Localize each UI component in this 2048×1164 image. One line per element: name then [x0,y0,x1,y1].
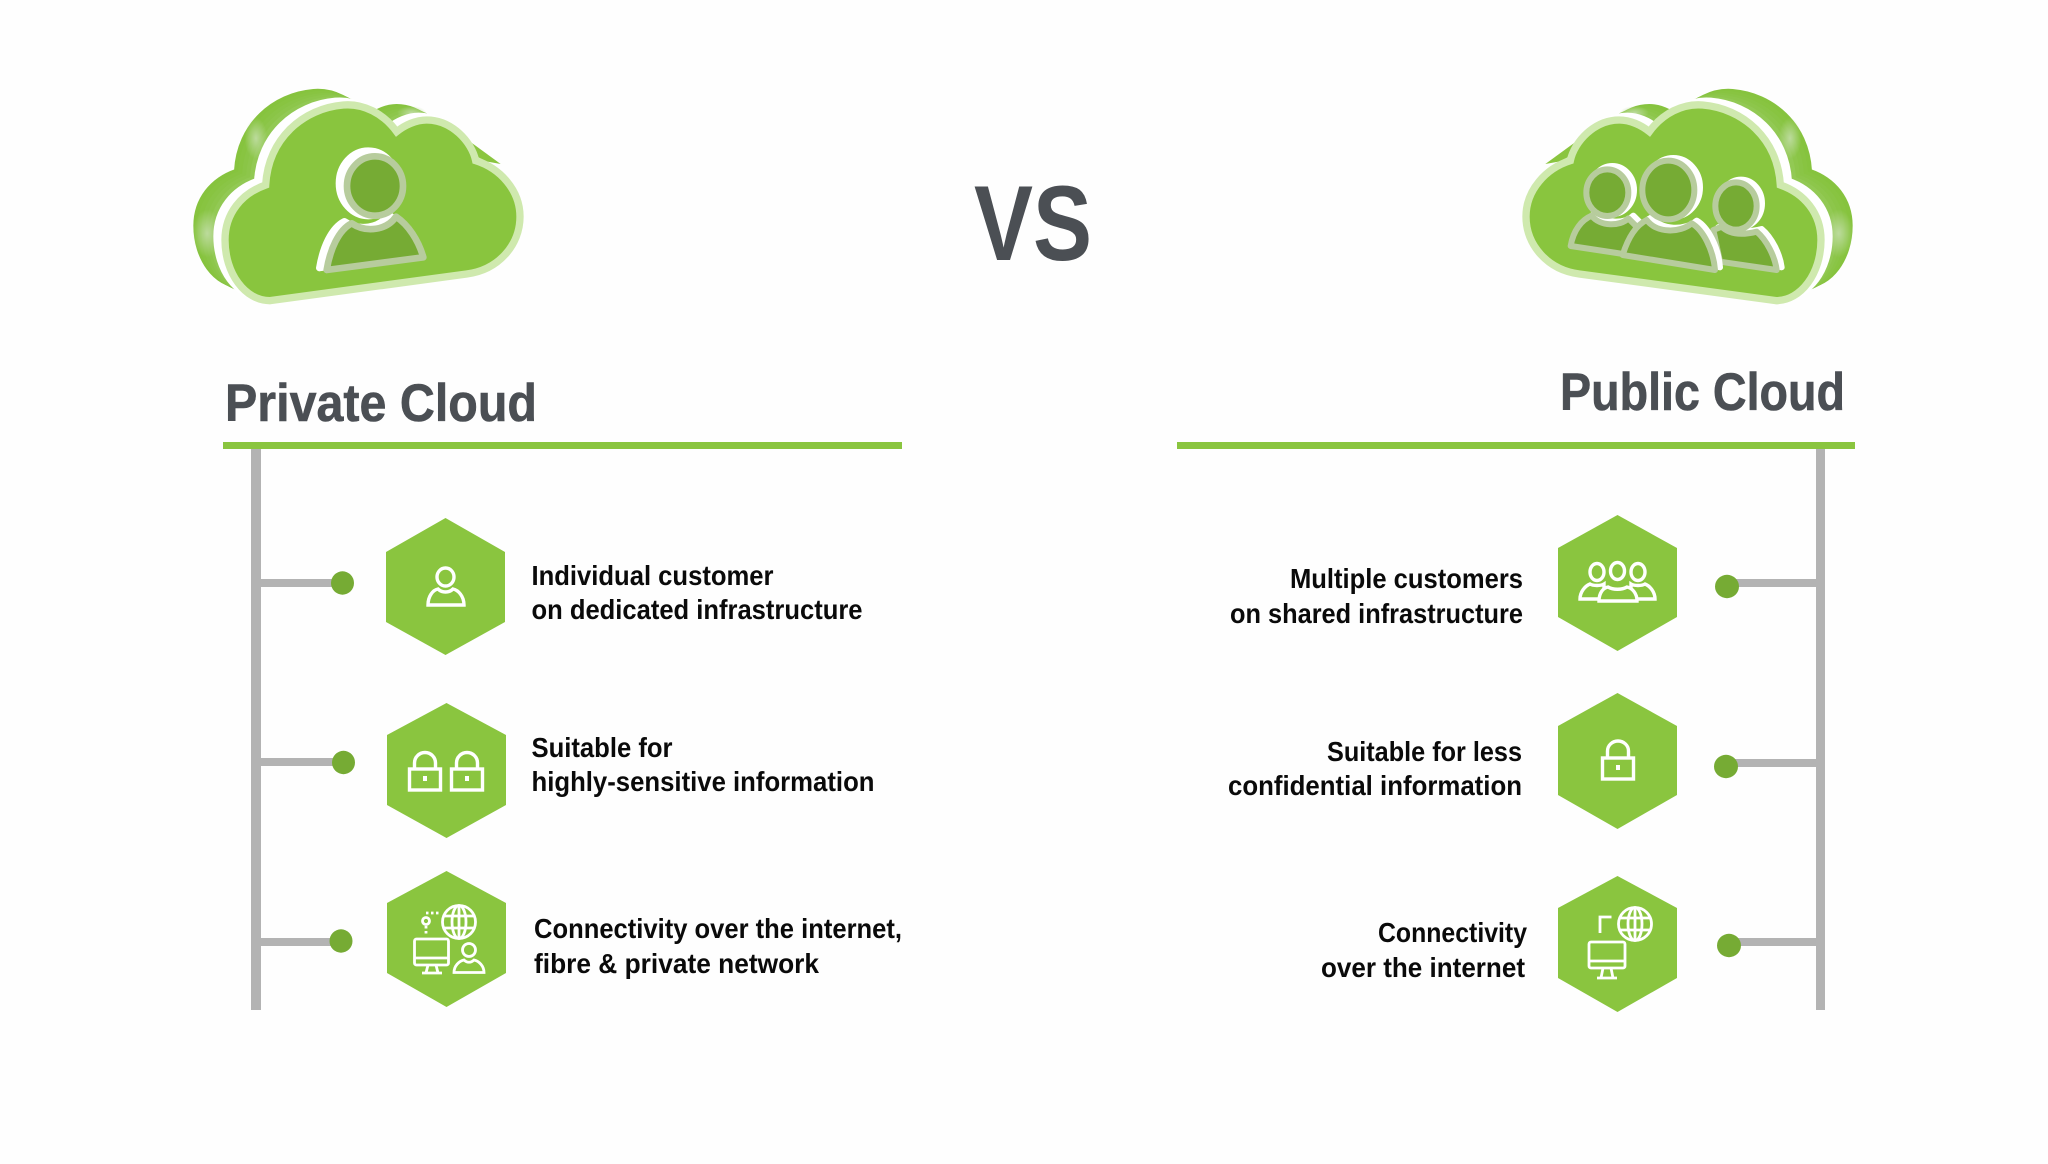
user figure [319,151,423,270]
timeline spine [251,449,261,1010]
row: connectivity over the internet [1321,876,1816,1012]
header rule [1177,442,1855,449]
icon: two padlocks [410,753,482,790]
icon: monitor, globe and user [414,906,484,973]
panel: public cloud [1177,363,1855,1012]
row: less confidential information: Suitable for less [1327,736,1522,767]
heading: Private Cloud: Private Cloud [225,374,537,433]
row: connectivity over internet, fibre and private network [261,871,902,1007]
icon: monitor and globe [1589,908,1652,978]
timeline spine [1816,449,1825,1010]
row: less confidential information: confidential information [1228,770,1522,801]
row: individual customer: on dedicated infrastructure [532,594,862,625]
users figures [1571,158,1782,270]
row: highly-sensitive information: Suitable for [532,732,673,763]
illustration: private cloud with single user [193,90,520,301]
header rule [223,442,902,449]
row: connectivity over internet, fibre and private network: fibre & private network [534,948,819,979]
row: multiple customers [1230,515,1816,651]
row: individual customer: Individual customer [532,560,774,591]
row: multiple customers: Multiple customers [1290,563,1523,594]
row: multiple customers: on shared infrastructure [1230,598,1523,629]
heading: VS: VS [974,163,1092,283]
row: highly-sensitive information [261,703,874,838]
row: individual customer [261,518,862,655]
icon: person [428,568,464,605]
icon: three people [1580,562,1655,601]
panel: private cloud [223,374,902,1010]
heading: Public Cloud: Public Cloud [1560,363,1845,422]
row: connectivity over the internet: over the internet [1321,952,1525,983]
row: connectivity over internet, fibre and private network: Connectivity over the internet, [534,913,902,944]
illustration: public cloud with three users [1526,90,1853,301]
row: connectivity over the internet: Connectivity [1378,917,1527,948]
icon: padlock [1602,741,1634,779]
row: less confidential information [1228,693,1816,829]
row: highly-sensitive information: highly-sensitive information [532,766,874,797]
